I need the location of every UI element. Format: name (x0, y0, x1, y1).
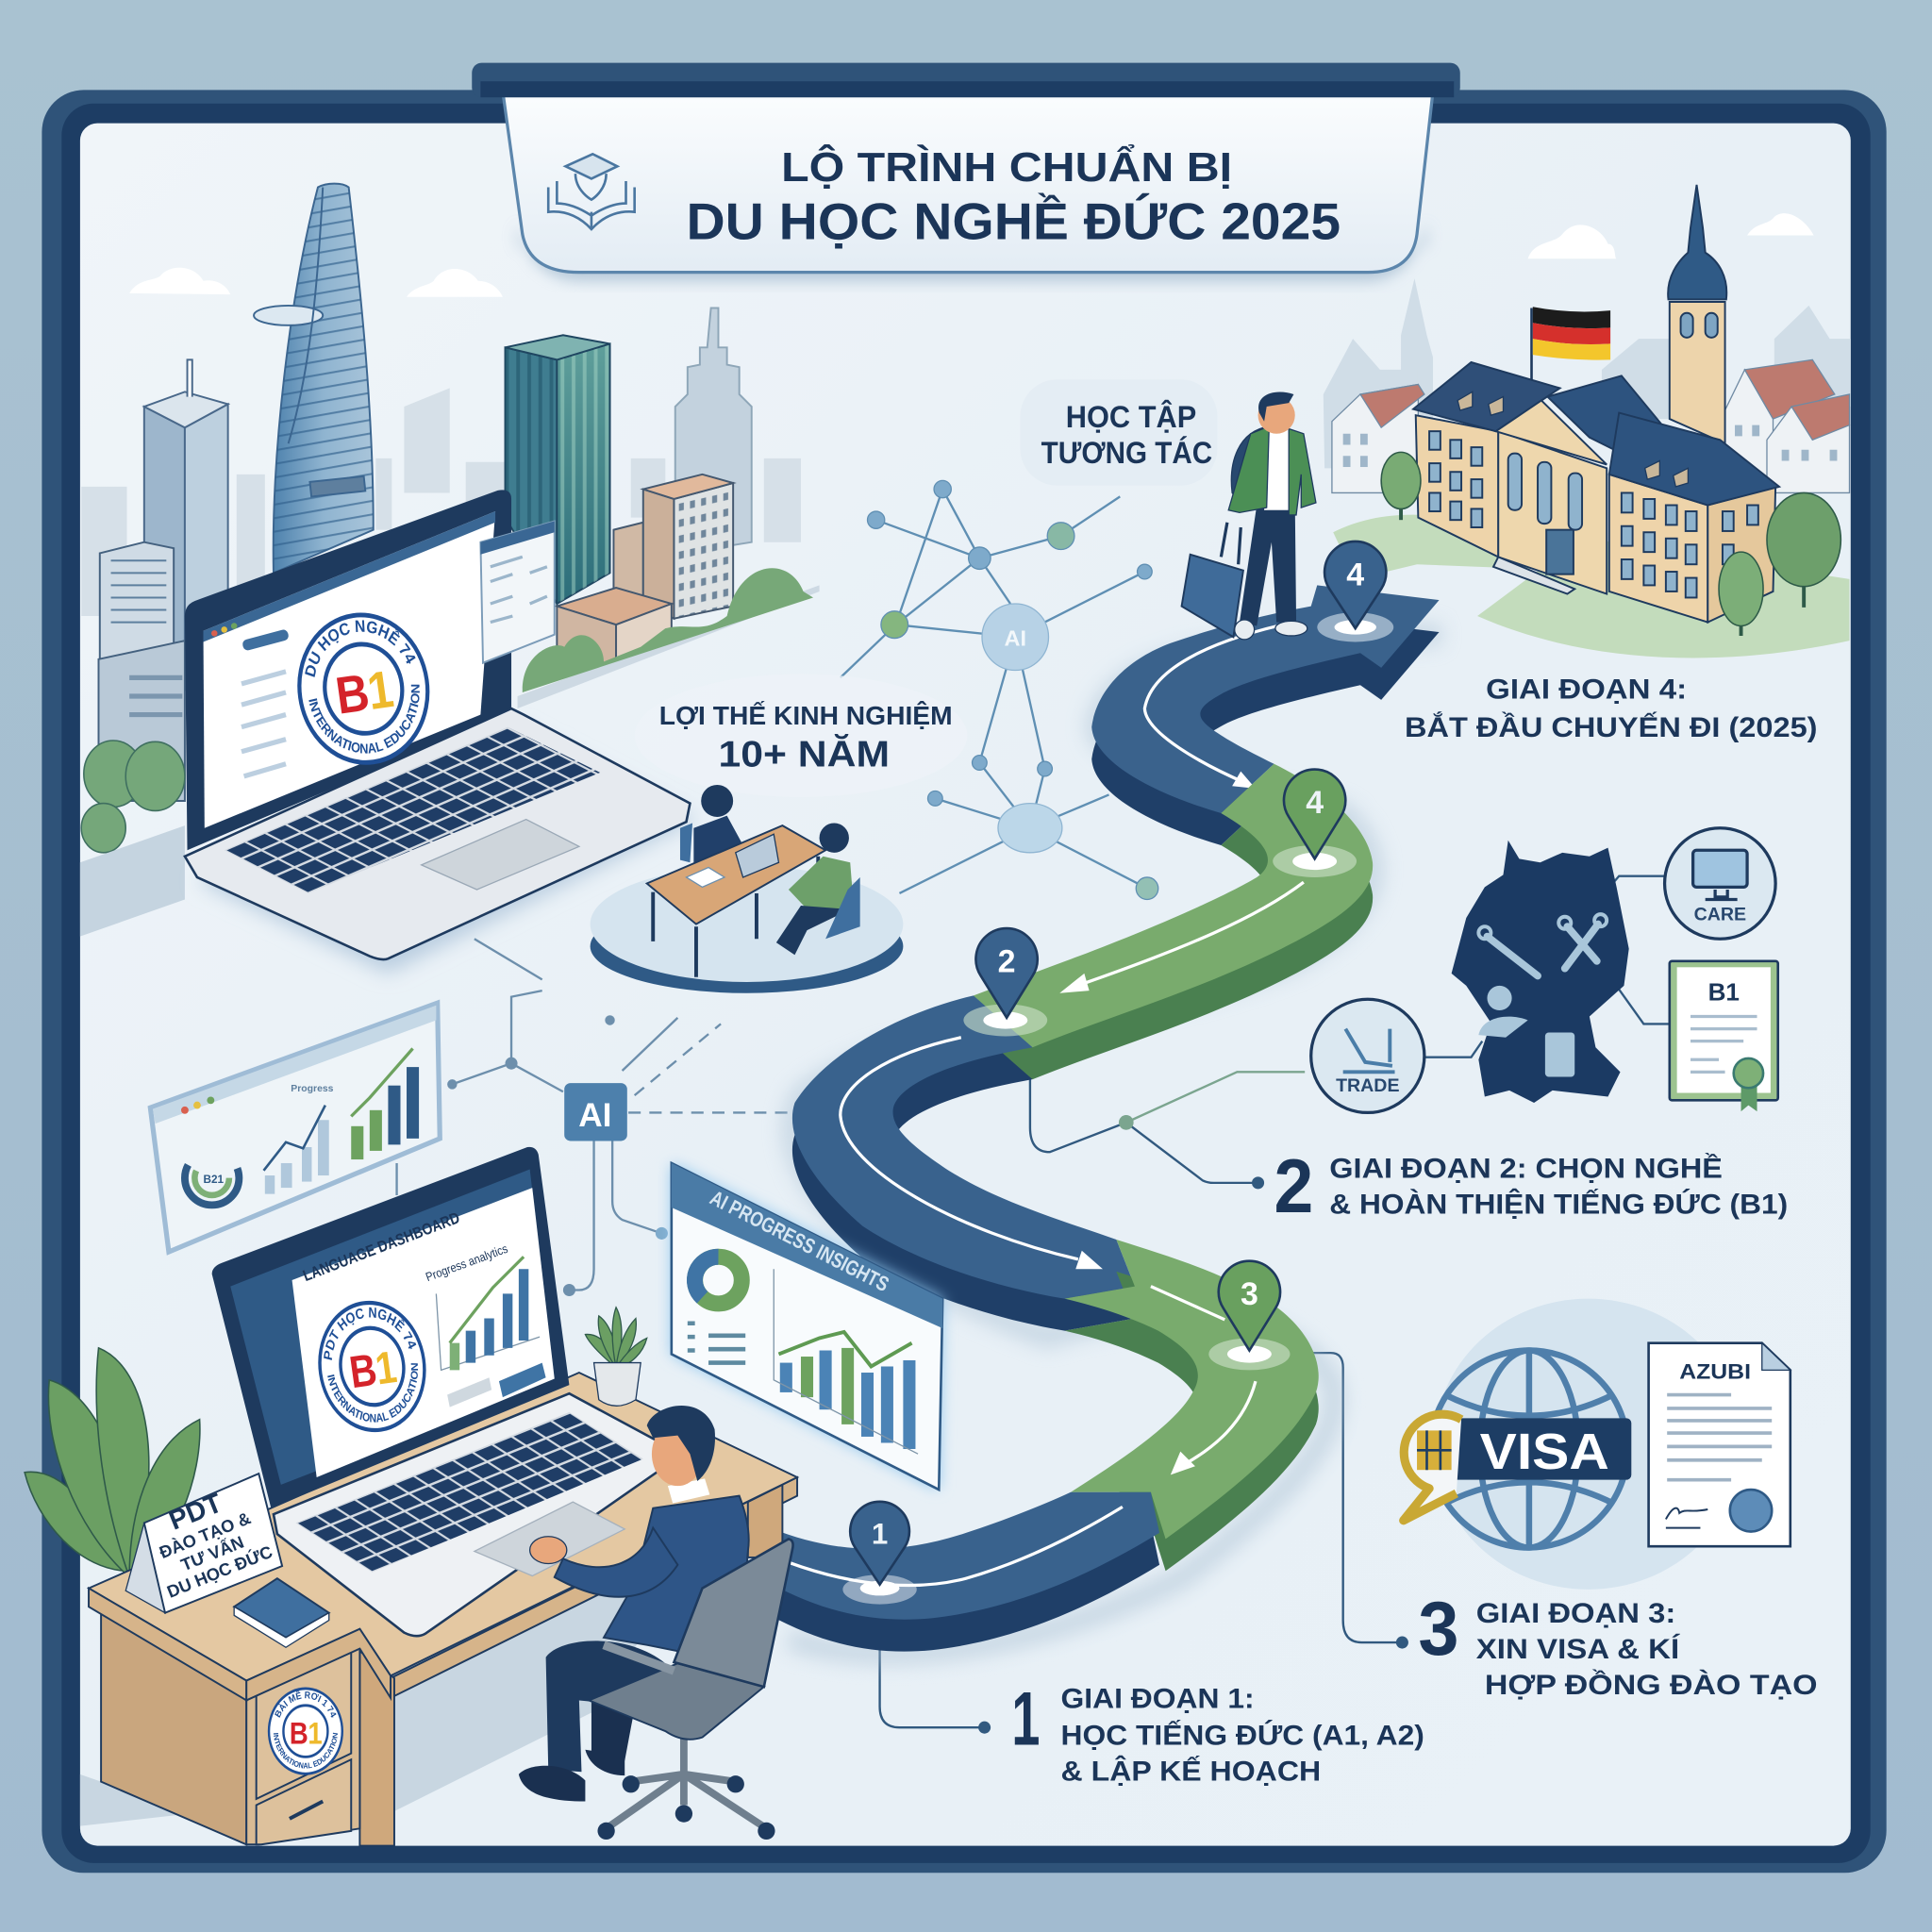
connector lines (397, 876, 1671, 1727)
distant buildings (81, 388, 801, 616)
brown building (557, 475, 733, 665)
shoes (1235, 620, 1255, 640)
AI network (841, 480, 1158, 899)
desk plant (585, 1307, 647, 1406)
pin 4 green: 4 (1306, 785, 1324, 821)
label: stage 2: & HOÀN THIỆN TIẾNG ĐỨC (B1) (1329, 1189, 1788, 1221)
label: stage 1 (1011, 1676, 1424, 1787)
cabinet (101, 1613, 246, 1844)
label: experience (635, 674, 967, 797)
left low buildings (98, 542, 185, 801)
laptop with logo (top) (183, 490, 694, 979)
logo: 1 (364, 659, 397, 721)
shirt (1264, 429, 1291, 510)
legend rows (688, 1324, 745, 1363)
suitcase (1182, 555, 1243, 637)
trees (1381, 452, 1840, 636)
laptop base (185, 708, 690, 959)
chair back (674, 1539, 793, 1687)
road green segment 4 (974, 764, 1373, 1079)
desk sign: DU HỌC ĐỨC (164, 1541, 275, 1602)
road green segment 3 (1064, 1240, 1319, 1571)
laptop screen (185, 490, 511, 850)
church tower (1668, 185, 1726, 443)
paper (687, 868, 724, 887)
scene: Vietnam city skyline (80, 184, 820, 937)
suitcase handle (1221, 523, 1241, 564)
dormers (1457, 391, 1688, 487)
screen logo: 1 (373, 1341, 400, 1394)
pin 2: 2 (998, 944, 1016, 980)
near leg (546, 1641, 665, 1772)
Germany map with vocational icons (1452, 841, 1629, 1103)
file cabinet logo: B (290, 1717, 308, 1751)
desk sign: ĐÀO TẠO & (157, 1507, 254, 1562)
label: experience: LỢI THẾ KINH NGHIỆM (659, 701, 953, 730)
legs (1240, 506, 1296, 626)
icon: CARE (1665, 828, 1775, 939)
desk (647, 825, 825, 924)
teal tower (506, 335, 610, 604)
pin 4 blue: 4 (1346, 557, 1364, 592)
icon: graduation cap and book (548, 154, 635, 229)
office desk scene (24, 1147, 800, 1846)
backpack (1231, 426, 1269, 506)
document: B1 certificate (1670, 961, 1778, 1111)
label: stage 4: BẮT ĐẦU CHUYẾN ĐI (2025) (1405, 711, 1818, 743)
desk top (89, 1373, 797, 1681)
desk sign: PDT (165, 1488, 226, 1537)
label: interactive learning: TƯƠNG TÁC (1041, 435, 1212, 470)
screen logo: INTERNATIONAL EDUCATION (327, 1363, 419, 1423)
pin 4 blue (1317, 541, 1393, 641)
banner shadow (518, 222, 1426, 281)
plant: tall (25, 1348, 204, 1577)
title text: LỘ TRÌNH CHUẨN BỊ (781, 144, 1232, 191)
book (234, 1578, 329, 1638)
Bitexco tower (254, 184, 374, 573)
laptop with dashboard: Progress analytics (424, 1241, 510, 1284)
label: stage 3: GIAI ĐOẠN 3: (1476, 1598, 1675, 1629)
pin 1 (842, 1502, 917, 1605)
screen logo: PDT HỌC NGHỀ 74 (324, 1307, 417, 1360)
file cabinet logo: BÀI MẼ RƠI 1 74 (275, 1690, 336, 1718)
logo: DU HỌC NGHỀ 74 (305, 620, 415, 677)
seated person (519, 1406, 793, 1840)
desk sign: TƯ VẤN (178, 1532, 246, 1574)
logo (297, 613, 430, 765)
visa banner (1449, 1418, 1631, 1480)
icon: CARE: CARE (1694, 905, 1746, 925)
pin 1: 1 (872, 1518, 888, 1551)
clouds (1528, 213, 1814, 258)
AZUBI contract (1649, 1343, 1790, 1546)
badge icon (1545, 1033, 1574, 1077)
pin 3 (1208, 1261, 1291, 1370)
AI network: AI (1004, 625, 1026, 650)
visa and contract: AZUBI (1679, 1360, 1751, 1384)
street and city trees (518, 585, 820, 708)
screen logo: B (346, 1344, 380, 1398)
side window (480, 521, 555, 663)
consultant right (776, 823, 860, 955)
road blue segment 2 (792, 995, 1135, 1331)
chair base (607, 1731, 766, 1828)
label: stage 3: XIN VISA & KÍ (1476, 1633, 1680, 1665)
worker icon (1487, 986, 1512, 1010)
label: stage 1: HỌC TIẾNG ĐỨC (A1, A2) (1061, 1719, 1424, 1751)
label: interactive learning: HỌC TẬP (1066, 399, 1196, 434)
file cabinet logo: INTERNATIONAL EDUCATION (274, 1732, 338, 1769)
road blue segment 4 (1091, 585, 1440, 845)
visa and contract: VISA (1480, 1424, 1609, 1480)
torso (604, 1496, 749, 1663)
floor under desk (394, 1577, 641, 1811)
clouds (129, 268, 503, 297)
lawn (1333, 515, 1849, 658)
far leg and shoe (591, 1663, 641, 1760)
bars (780, 1351, 915, 1449)
pin 4 green (1273, 770, 1357, 877)
shoe (519, 1766, 585, 1802)
chair arm (604, 1645, 674, 1671)
school building (1413, 362, 1779, 623)
flag (1532, 307, 1610, 382)
label: stage 2 (1274, 1144, 1788, 1229)
label: stage 2: GIAI ĐOẠN 2: CHỌN NGHỀ (1329, 1153, 1723, 1185)
screen logo (318, 1300, 426, 1432)
hand (530, 1537, 567, 1563)
small laptop (736, 834, 778, 877)
jacket (1228, 426, 1269, 512)
wrench icons (1478, 914, 1607, 975)
gold seal (1404, 1414, 1461, 1521)
connector dots (447, 1015, 1408, 1734)
panel: dashboard card: Progress (291, 1084, 334, 1094)
label: stage 1: & LẬP KẾ HOẠCH (1061, 1755, 1321, 1787)
head (1258, 397, 1295, 434)
scene: German town and school (1324, 185, 1851, 658)
hex node (998, 804, 1062, 853)
road blue segment 1 (770, 1492, 1159, 1652)
left office tower (144, 359, 228, 690)
panel: AI progress insights (672, 1163, 942, 1490)
laptop with dashboard: LANGUAGE DASHBOARD (301, 1208, 462, 1285)
logo: B (332, 662, 373, 725)
pin 3: 3 (1241, 1276, 1258, 1312)
distant town (1324, 278, 1851, 468)
consultant left (680, 785, 749, 877)
desk (89, 1373, 797, 1846)
icon: TRADE: TRADE (1336, 1075, 1400, 1096)
floor left of cabinet (80, 1774, 178, 1826)
roadmap road (770, 585, 1441, 1654)
panel: dashboard card (150, 1003, 440, 1252)
laptop with dashboard (211, 1147, 658, 1638)
label: stage 1: 1 (1011, 1676, 1040, 1761)
panel: AI progress insights: AI PROGRESS INSIGHTS (707, 1186, 892, 1296)
logo: INTERNATIONAL EDUCATION (308, 685, 420, 754)
globe (1430, 1351, 1627, 1547)
pin 2 (963, 928, 1047, 1036)
title banner: DU HỌC NGHỀ ĐỨC 2025 (687, 192, 1341, 250)
arm (555, 1528, 677, 1597)
visa and contract (1404, 1299, 1790, 1590)
back houses (1332, 359, 1849, 492)
traveler with suitcase (1182, 392, 1316, 640)
file cabinet logo (268, 1687, 343, 1775)
screen chart (436, 1293, 540, 1370)
document: B1 certificate: B1 (1708, 978, 1740, 1007)
title banner (472, 63, 1460, 273)
gray skyscraper (675, 308, 752, 555)
label: stage 3 (1418, 1587, 1818, 1701)
label: interactive learning (1020, 379, 1217, 486)
file cabinet logo: 1 (308, 1717, 323, 1751)
laptop 2 base (274, 1393, 668, 1636)
AI box: AI (578, 1097, 611, 1134)
label: stage 4: GIAI ĐOẠN 4: (1486, 675, 1687, 706)
desk sign (125, 1474, 282, 1613)
collar and head (668, 1478, 709, 1503)
label: stage 3: HỢP ĐỒNG ĐÀO TẠO (1485, 1669, 1818, 1701)
icon: TRADE (1311, 999, 1424, 1112)
chair seat (589, 1663, 764, 1740)
road shadow (789, 635, 1441, 1654)
label: stage 4 (1405, 675, 1818, 743)
AI box (564, 1083, 627, 1141)
label: stage 1: GIAI ĐOẠN 1: (1061, 1683, 1255, 1714)
banner rod (472, 63, 1460, 97)
AI node (982, 604, 1049, 671)
donut chart (695, 1257, 741, 1304)
label: experience: 10+ NĂM (718, 733, 890, 774)
label: stage 2: 2 (1274, 1144, 1313, 1229)
panel: dashboard card: B21 (204, 1174, 225, 1186)
label: stage 3: 3 (1418, 1587, 1458, 1672)
central consultation platform (591, 785, 903, 993)
